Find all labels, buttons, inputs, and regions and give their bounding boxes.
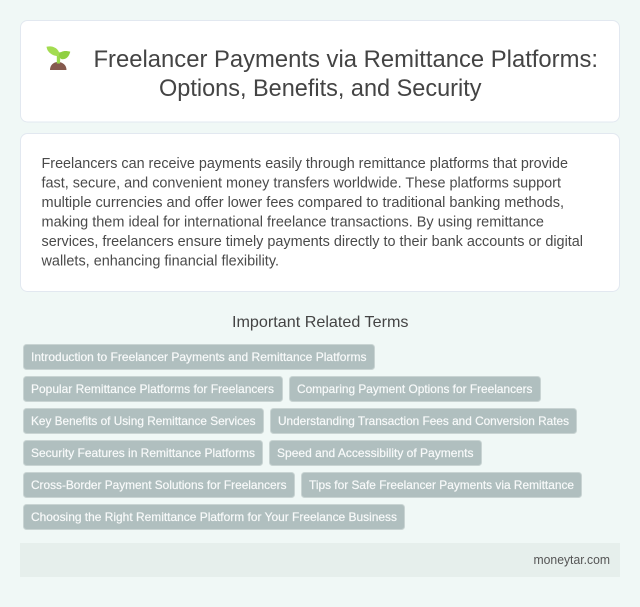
tag: popular platforms — [24, 376, 282, 402]
tag list: related terms — [24, 344, 582, 530]
tag: comparing options — [290, 376, 540, 402]
panel: description card — [20, 134, 620, 292]
tag: cross-border: Cross-Border Payment Solutions for Freelancers — [31, 478, 286, 492]
tag: fees and rates: Understanding Transaction Fees and Conversion Rates — [278, 414, 569, 428]
heading: main title: Freelancer Payments via Remittance Platforms: — [94, 46, 598, 73]
tag: speed and accessibility: Speed and Accessibility of Payments — [277, 446, 474, 460]
text block: description: services, freelancers ensure timely payments directly to their bank accounts or digital — [42, 234, 583, 250]
text block: description: making them ideal for international freelance transactions. By using remittance — [42, 214, 544, 230]
tag: introduction: Introduction to Freelancer Payments and Remittance Platforms — [31, 350, 366, 364]
heading: main title — [94, 46, 598, 102]
tag: fees and rates — [270, 408, 576, 434]
tag: choosing a platform: Choosing the Right Remittance Platform for Your Freelance Business — [31, 510, 397, 524]
tag: safety tips: Tips for Safe Freelancer Payments via Remittance — [309, 478, 574, 492]
heading: main title: Options, Benefits, and Security — [159, 75, 482, 102]
tag: cross-border — [24, 472, 294, 498]
text block: description: wallets, enhancing financial flexibility. — [41, 254, 279, 270]
tag: key benefits: Key Benefits of Using Remittance Services — [31, 414, 256, 428]
text block: description: multiple currencies and offer lower fees compared to traditional banking methods, — [42, 195, 564, 211]
text block: description: Freelancers can receive payments easily through remittance platforms that provide — [42, 156, 568, 172]
text block: description — [41, 156, 583, 270]
heading: important related terms: Important Related Terms — [232, 314, 408, 331]
footer text: source: moneytar.com — [534, 553, 610, 567]
icon: seedling — [46, 46, 70, 70]
text block: description: fast, secure, and convenient money transfers worldwide. These platforms support — [42, 176, 561, 192]
panel: title card — [20, 20, 620, 122]
tag: introduction — [24, 344, 374, 370]
tag: security features — [24, 440, 262, 466]
tag: key benefits — [24, 408, 264, 434]
tag: speed and accessibility — [270, 440, 482, 466]
tag: popular platforms: Popular Remittance Platforms for Freelancers — [31, 382, 274, 396]
tag: choosing a platform — [24, 504, 404, 530]
tag: comparing options: Comparing Payment Options for Freelancers — [297, 382, 532, 396]
tag: safety tips — [302, 472, 582, 498]
tag: security features: Security Features in Remittance Platforms — [31, 446, 255, 460]
footer bar — [20, 543, 620, 577]
